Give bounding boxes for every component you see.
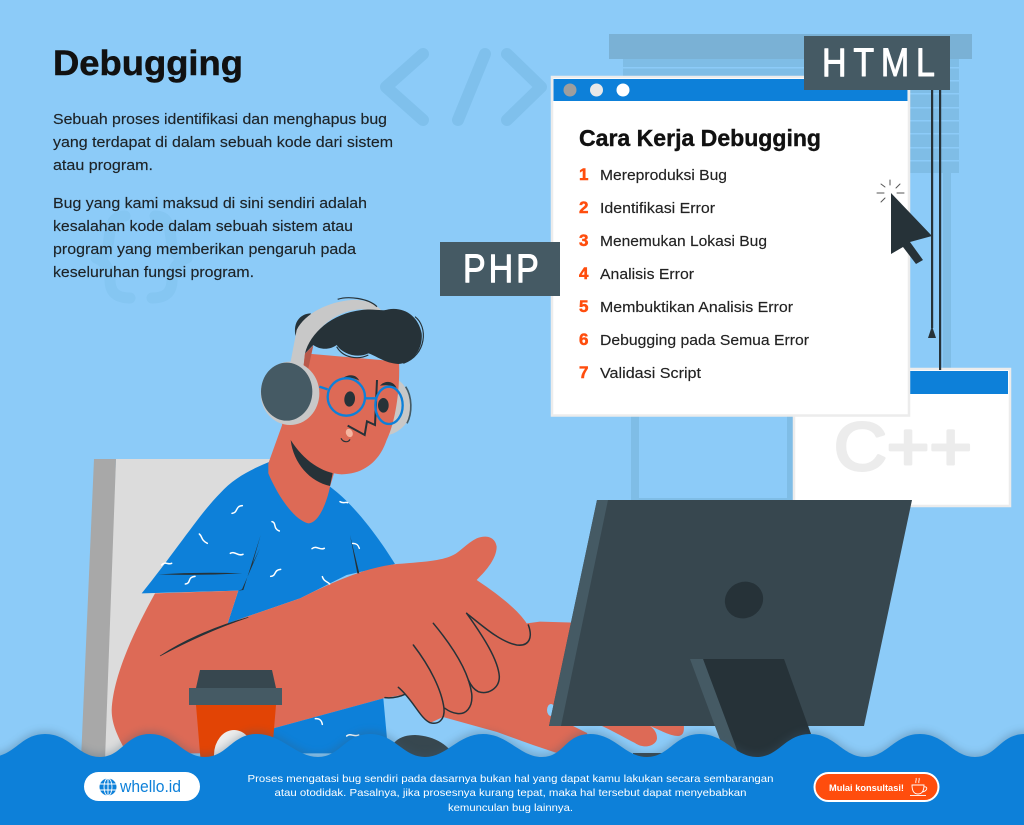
list of steps: 5 bbox=[579, 297, 588, 316]
panel: C++ window bbox=[794, 369, 1010, 506]
shirt pattern bbox=[162, 502, 359, 736]
eyebrows bbox=[343, 375, 359, 381]
text block: definition: atau program. bbox=[53, 157, 153, 174]
text block: definition: yang terdapat di dalam sebuah kode dari sistem bbox=[53, 134, 393, 151]
icon: mouse cursor bbox=[877, 180, 932, 264]
illustration: person body bbox=[112, 461, 600, 753]
left headphone cup bbox=[261, 362, 319, 425]
illustration: head with headphones bbox=[261, 298, 423, 523]
headphone band bbox=[290, 300, 381, 368]
face bbox=[282, 353, 399, 474]
footer text bbox=[248, 773, 774, 814]
list of steps: 6 bbox=[579, 330, 588, 349]
footer band with waves bbox=[0, 734, 1024, 825]
hair back bbox=[295, 313, 311, 340]
footer text: atau otodidak. Pasalnya, jika prosesnya kurang tepat, maka hal tersebut dapat menyebabkan bbox=[274, 787, 747, 799]
list of steps: 4 bbox=[579, 264, 589, 283]
window blinds backdrop bbox=[609, 34, 972, 501]
list of steps: Debugging pada Semua Error bbox=[600, 332, 809, 349]
desk object bbox=[633, 753, 663, 761]
text block: explanation: keseluruhan fungsi program. bbox=[53, 264, 254, 281]
list of steps: 1 bbox=[579, 165, 588, 184]
nose and mouth bbox=[348, 380, 377, 435]
footer text: kemunculan bug lainnya. bbox=[448, 802, 573, 814]
monitor bbox=[549, 500, 912, 765]
right headphone cup bbox=[382, 378, 410, 435]
icon: background curly braces bbox=[96, 216, 187, 298]
icon: background code brackets bbox=[386, 54, 541, 120]
button: Mulai konsultasi: Mulai konsultasi! bbox=[829, 783, 904, 794]
text block: definition: Sebuah proses identifikasi dan menghapus bug bbox=[53, 111, 387, 128]
list of steps: Mereproduksi Bug bbox=[600, 167, 727, 184]
computer mouse bbox=[214, 730, 254, 780]
icon: coffee cup bbox=[189, 670, 282, 765]
text block: explanation: kesalahan kode dalam sebuah sistem atau bbox=[53, 218, 353, 235]
list of steps bbox=[579, 165, 809, 382]
label: HTML bbox=[804, 36, 950, 90]
wave shadow bbox=[0, 731, 1024, 777]
arm crease bbox=[160, 617, 248, 656]
list of steps: 3 bbox=[579, 231, 588, 250]
label: PHP bbox=[440, 242, 560, 296]
hair bbox=[305, 309, 422, 364]
dark chair base bbox=[388, 735, 458, 762]
list of steps: Menemukan Lokasi Bug bbox=[600, 233, 767, 250]
collar shadow bbox=[291, 440, 333, 486]
list of steps: Analisis Error bbox=[600, 266, 694, 283]
chair bbox=[81, 459, 300, 760]
hair shadow on forehead bbox=[304, 345, 313, 368]
list of steps: 2 bbox=[579, 198, 588, 217]
logo pill: whello.id: whello.id bbox=[119, 777, 181, 796]
text block: explanation bbox=[53, 195, 367, 281]
list of steps: Identifikasi Error bbox=[600, 200, 715, 217]
shirt bbox=[142, 461, 395, 623]
footer text: Proses mengatasi bug sendiri pada dasarnya bukan hal yang dapat kamu lakukan secara sembarangan bbox=[248, 773, 774, 785]
text block: explanation: program yang memberikan pengaruh pada bbox=[53, 241, 357, 258]
monitor stand bbox=[703, 659, 815, 765]
finger lines bbox=[385, 613, 530, 723]
heading: Cara Kerja Debugging: Cara Kerja Debugging bbox=[579, 125, 821, 151]
text block: explanation: Bug yang kami maksud di sini sendiri adalah bbox=[53, 195, 367, 212]
C++ label: C++ bbox=[834, 409, 972, 485]
window cords bbox=[928, 88, 941, 370]
list of steps: 7 bbox=[579, 363, 588, 382]
gap beside monitor bbox=[547, 704, 555, 716]
lower shirt bbox=[267, 698, 388, 753]
heading: Debugging: Debugging bbox=[53, 44, 243, 83]
shirt creases bbox=[158, 535, 359, 591]
eyes bbox=[344, 391, 356, 407]
glasses bbox=[319, 378, 403, 424]
fingers behind monitor bbox=[600, 720, 684, 746]
icon: coffee bbox=[910, 778, 927, 796]
list of steps: Membuktikan Analisis Error bbox=[600, 299, 793, 316]
label: HTML: HTML bbox=[822, 39, 942, 85]
icon: globe bbox=[100, 778, 116, 796]
button: Mulai konsultasi bbox=[814, 773, 938, 801]
neck bbox=[268, 422, 335, 523]
label: PHP: PHP bbox=[463, 245, 542, 291]
arm and hand bbox=[112, 537, 600, 753]
list of steps: Validasi Script bbox=[600, 365, 702, 382]
text block: definition bbox=[53, 111, 393, 174]
logo pill: whello.id bbox=[84, 772, 200, 801]
panel: Cara Kerja Debugging window bbox=[552, 77, 909, 416]
